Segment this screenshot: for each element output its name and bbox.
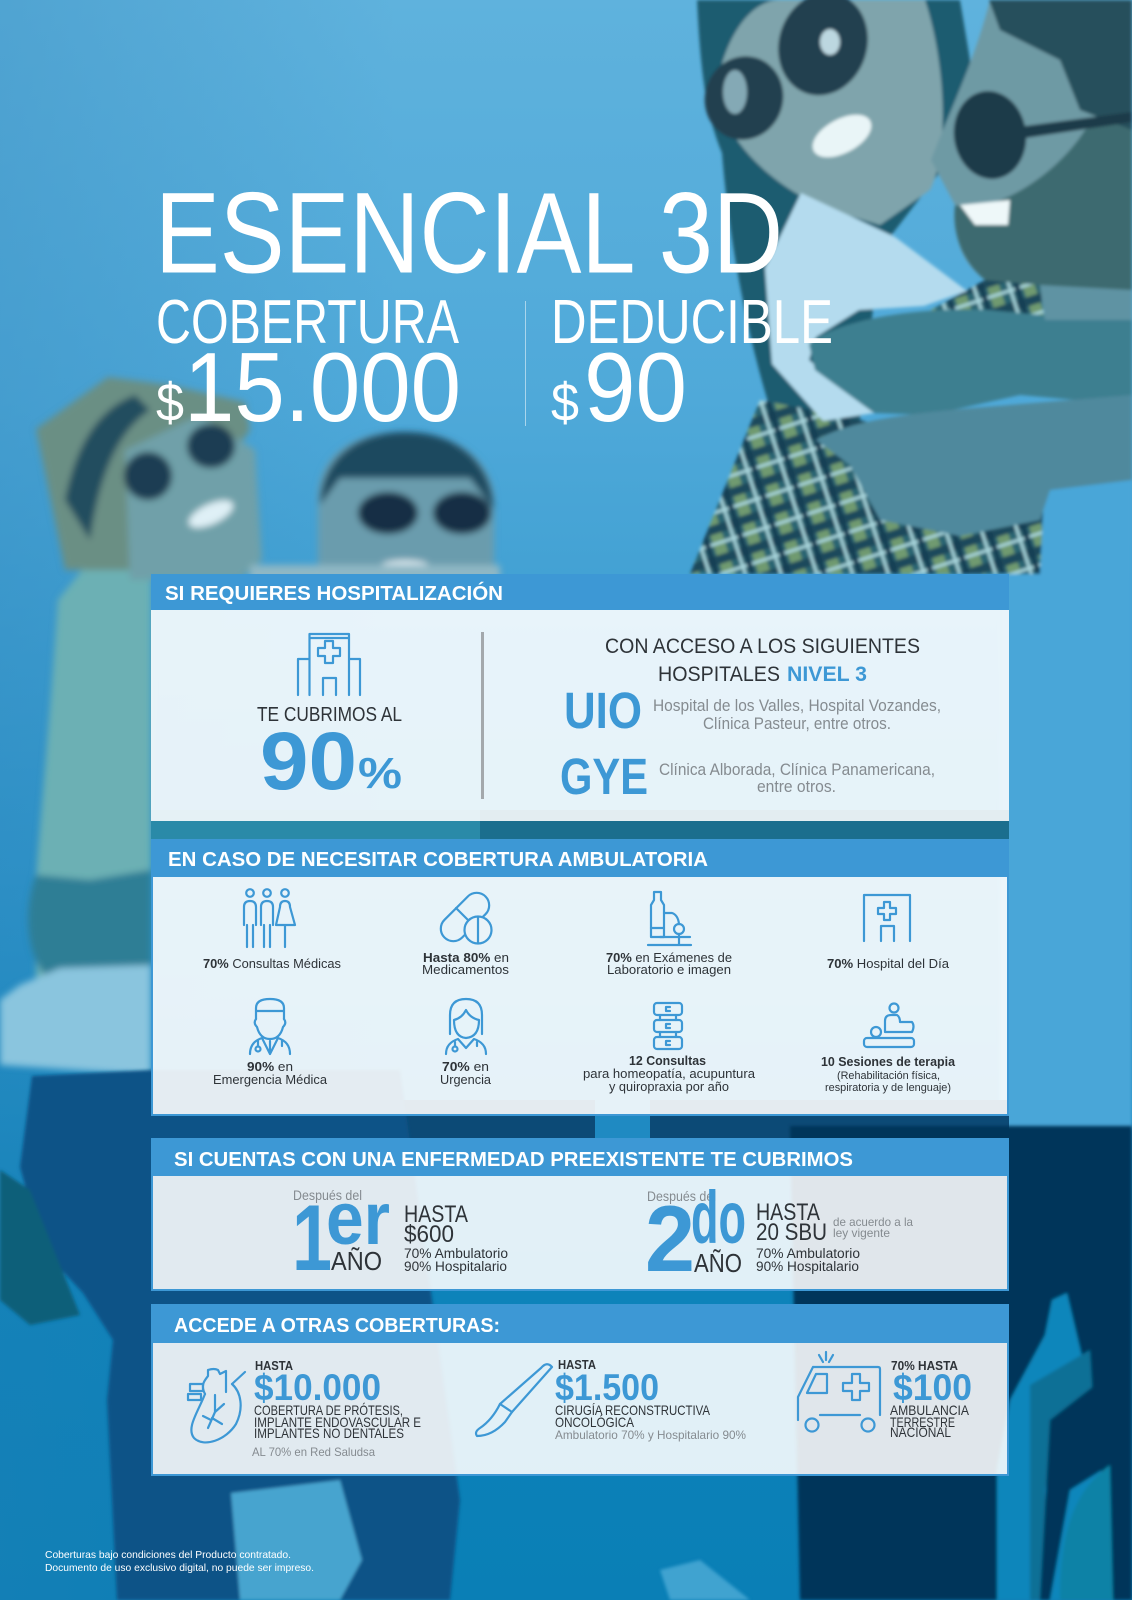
heading bar: EN CASO DE NECESITAR COBERTURA AMBULATORIA bbox=[168, 848, 708, 871]
footer note: Documento de uso exclusivo digital, no puede ser impreso. bbox=[45, 1562, 314, 1574]
item: emergencia médica: 90% en bbox=[247, 1059, 293, 1074]
heading bar bbox=[151, 1304, 1009, 1342]
left couple (out of focus) bbox=[0, 377, 500, 1075]
block: segundo año: 20 SBU bbox=[756, 1219, 827, 1246]
item: consultas médicas: 70% Consultas Médicas bbox=[203, 956, 341, 971]
footer note bbox=[45, 1549, 314, 1574]
vertical divider bbox=[481, 632, 484, 799]
block: cobertura: 15.000 bbox=[184, 332, 461, 442]
panel: hospitalización bbox=[151, 574, 1009, 821]
block: primer año: 70% Ambulatorio bbox=[404, 1246, 508, 1261]
item: cirugía reconstructiva: ONCOLÓGICA bbox=[555, 1414, 635, 1430]
text: acceso a hospitales: HOSPITALES bbox=[658, 663, 780, 686]
block: cobertura bbox=[156, 288, 461, 442]
item: cirugía reconstructiva bbox=[476, 1357, 746, 1442]
panel body bbox=[152, 1342, 1008, 1475]
city: UIO bbox=[564, 682, 941, 739]
item: ambulancia: NACIONAL bbox=[890, 1424, 951, 1440]
item: cirugía reconstructiva: HASTA bbox=[558, 1357, 597, 1372]
legs and jeans bbox=[0, 1070, 1132, 1600]
city: GYE: GYE bbox=[560, 748, 648, 805]
block: segundo año: 70% Ambulatorio bbox=[756, 1246, 860, 1261]
block: primer año: er bbox=[326, 1177, 390, 1260]
item: prótesis: HASTA bbox=[255, 1358, 294, 1373]
city: GYE: Clínica Alborada, Clínica Panamericana, bbox=[659, 761, 935, 779]
text: acceso a hospitales: CON ACCESO A LOS SIGUIENTES bbox=[605, 635, 920, 658]
item: prótesis: IMPLANTES NO DENTALES bbox=[254, 1425, 404, 1441]
heading bar bbox=[151, 839, 1009, 876]
item: homeopatía y acupuntura: 12 Consultas bbox=[629, 1053, 706, 1068]
text: acceso a hospitales: NIVEL 3 bbox=[787, 663, 867, 686]
item: ambulancia bbox=[798, 1352, 972, 1440]
city: UIO: Hospital de los Valles, Hospital Vozandes, bbox=[653, 697, 941, 715]
item: medicamentos: Hasta 80% en bbox=[423, 950, 509, 965]
block: segundo año bbox=[645, 1176, 913, 1291]
icon: ambulance bbox=[798, 1352, 880, 1432]
item: ambulancia: AMBULANCIA bbox=[890, 1402, 970, 1418]
item: laboratorio bbox=[606, 892, 732, 977]
panel body bbox=[151, 610, 1009, 821]
city: UIO: UIO bbox=[564, 682, 642, 739]
city: GYE: entre otros. bbox=[757, 778, 836, 796]
heading bar bbox=[151, 1138, 1009, 1175]
icon: hospital bbox=[298, 634, 360, 695]
item: emergencia médica bbox=[213, 999, 328, 1087]
stat: 90% bbox=[260, 716, 402, 807]
panel body bbox=[152, 1175, 1008, 1290]
item: hospital del día: 70% Hospital del Día bbox=[827, 956, 950, 971]
stat: 90%: 90 bbox=[260, 716, 357, 807]
block: deducible bbox=[551, 288, 833, 442]
item: cirugía reconstructiva: $1.500 bbox=[555, 1367, 659, 1408]
item: sesiones de terapia: (Rehabilitación física, bbox=[837, 1070, 940, 1082]
block: primer año bbox=[292, 1177, 508, 1290]
block: primer año: 90% Hospitalario bbox=[404, 1259, 507, 1274]
block: primer año: AÑO bbox=[331, 1246, 382, 1276]
block: segundo año: 2 bbox=[645, 1186, 695, 1291]
stat: 90%: % bbox=[358, 749, 402, 798]
block: segundo año: de acuerdo a la bbox=[833, 1215, 913, 1229]
item: medicamentos bbox=[422, 888, 510, 977]
item: sesiones de terapia: 10 Sesiones de terapia bbox=[821, 1054, 956, 1069]
item: medicamentos: Medicamentos bbox=[422, 962, 510, 977]
text: acceso a hospitales bbox=[605, 635, 920, 686]
item: hospital del día bbox=[827, 895, 950, 971]
text: te cubrimos al: TE CUBRIMOS AL bbox=[257, 704, 402, 726]
footer note: Coberturas bajo condiciones del Producto contratado. bbox=[45, 1549, 291, 1561]
panel: enfermedad preexistente bbox=[151, 1138, 1009, 1291]
divider bbox=[525, 301, 526, 426]
item: urgencia: Urgencia bbox=[440, 1072, 492, 1087]
item: ambulancia: TERRESTRE bbox=[890, 1414, 955, 1430]
block: primer año: $600 bbox=[404, 1221, 454, 1248]
item: sesiones de terapia bbox=[821, 1004, 956, 1094]
block: deducible: $ bbox=[551, 373, 579, 433]
block: segundo año: do bbox=[691, 1176, 746, 1259]
item: prótesis: $10.000 bbox=[254, 1367, 381, 1408]
icon: heart bbox=[188, 1369, 245, 1442]
heading bar bbox=[151, 574, 1009, 610]
heading bar: ACCEDE A OTRAS COBERTURAS: bbox=[174, 1314, 500, 1337]
panel: cobertura ambulatoria bbox=[151, 839, 1009, 1115]
item: prótesis: COBERTURA DE PRÓTESIS, bbox=[254, 1402, 403, 1418]
item: emergencia médica: Emergencia Médica bbox=[213, 1072, 328, 1087]
item: consultas médicas bbox=[203, 889, 341, 971]
item: ambulancia: $100 bbox=[893, 1367, 972, 1408]
heading bar: SI REQUIERES HOSPITALIZACIÓN bbox=[165, 581, 503, 605]
block: cobertura: $ bbox=[156, 373, 184, 433]
block: primer año: HASTA bbox=[404, 1201, 468, 1228]
item: prótesis bbox=[188, 1358, 421, 1459]
panel body bbox=[152, 876, 1008, 1115]
heading bar: SI CUENTAS CON UNA ENFERMEDAD PREEXISTENTE TE CUBRIMOS bbox=[174, 1148, 853, 1171]
item: prótesis: IMPLANTE ENDOVASCULAR E bbox=[254, 1414, 421, 1430]
block: deducible: 90 bbox=[584, 332, 687, 442]
block: segundo año: 90% Hospitalario bbox=[756, 1259, 859, 1274]
item: urgencia: 70% en bbox=[442, 1059, 489, 1074]
item: laboratorio: 70% en Exámenes de bbox=[606, 950, 732, 965]
item: sesiones de terapia: respiratoria y de lenguaje) bbox=[825, 1082, 951, 1094]
block: segundo año: Después del bbox=[647, 1188, 716, 1204]
item: laboratorio: Laboratorio e imagen bbox=[607, 962, 731, 977]
block: cobertura: COBERTURA bbox=[156, 288, 460, 357]
panel: otras coberturas bbox=[151, 1304, 1009, 1475]
block: deducible: DEDUCIBLE bbox=[551, 288, 833, 357]
block: segundo año: ley vigente bbox=[833, 1226, 890, 1240]
city: UIO: Clínica Pasteur, entre otros. bbox=[703, 715, 891, 733]
block: segundo año: HASTA bbox=[756, 1199, 820, 1226]
item: cirugía reconstructiva: CIRUGÍA RECONSTRUCTIVA bbox=[555, 1402, 711, 1418]
city: GYE bbox=[560, 748, 935, 805]
block: primer año: 1 bbox=[292, 1185, 332, 1290]
item: homeopatía y acupuntura: y quiropraxia por año bbox=[609, 1079, 729, 1094]
block: segundo año: AÑO bbox=[694, 1248, 742, 1278]
item: homeopatía y acupuntura bbox=[583, 1003, 756, 1094]
item: urgencia bbox=[440, 999, 492, 1087]
title: Esencial 3D: ESENCIAL 3D bbox=[155, 170, 783, 298]
item: prótesis: AL 70% en Red Saludsa bbox=[252, 1445, 375, 1459]
item: homeopatía y acupuntura: para homeopatía, acupuntura bbox=[583, 1066, 756, 1081]
right couple bbox=[690, 0, 1132, 1130]
block: primer año: Después del bbox=[293, 1187, 362, 1203]
icon: scalpel bbox=[476, 1364, 552, 1436]
item: ambulancia: 70% HASTA bbox=[891, 1358, 959, 1373]
item: cirugía reconstructiva: Ambulatorio 70% y Hospitalario 90% bbox=[555, 1428, 746, 1442]
gap colours behind panels bbox=[151, 810, 1009, 850]
